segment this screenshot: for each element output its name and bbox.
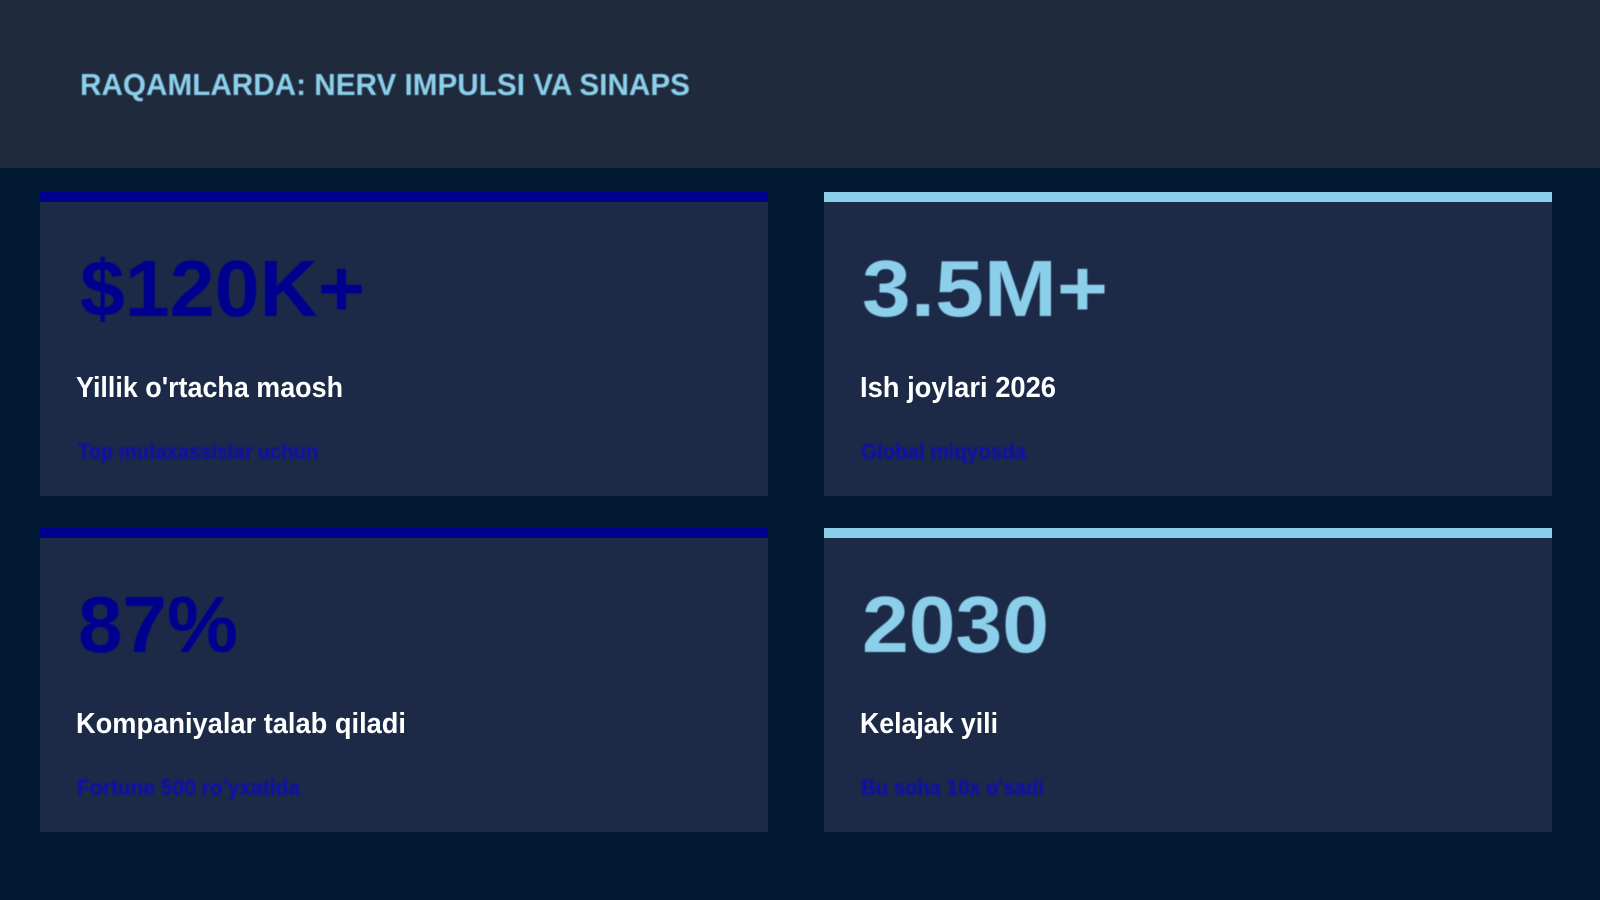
stat label: Kompaniyalar talab qiladi — [76, 708, 406, 740]
stat label: Yillik o'rtacha maosh — [76, 372, 343, 404]
stat value: 2030 — [862, 580, 1049, 669]
stat label: Ish joylari 2026 — [860, 372, 1056, 404]
stat note: Top mutaxassislar uchun — [78, 439, 318, 464]
stat label: Kelajak yili — [860, 708, 998, 740]
header band — [0, 0, 1600, 168]
stat note: Global miqyosda — [861, 439, 1027, 464]
stat value: $120K+ — [80, 244, 365, 333]
stat note: Bu soha 10x o'sadi — [861, 775, 1044, 800]
panel: jobs stat — [824, 192, 1552, 496]
panel: companies stat — [40, 528, 768, 832]
panel: salary stat — [40, 192, 768, 496]
panel: future year stat — [824, 528, 1552, 832]
stat note: Fortune 500 ro'yxatida — [77, 775, 301, 800]
title: RAQAMLARDA: NERV IMPULSI VA SINAPS — [80, 67, 690, 102]
stat value: 87% — [78, 580, 238, 669]
stat value: 3.5M+ — [862, 244, 1108, 333]
